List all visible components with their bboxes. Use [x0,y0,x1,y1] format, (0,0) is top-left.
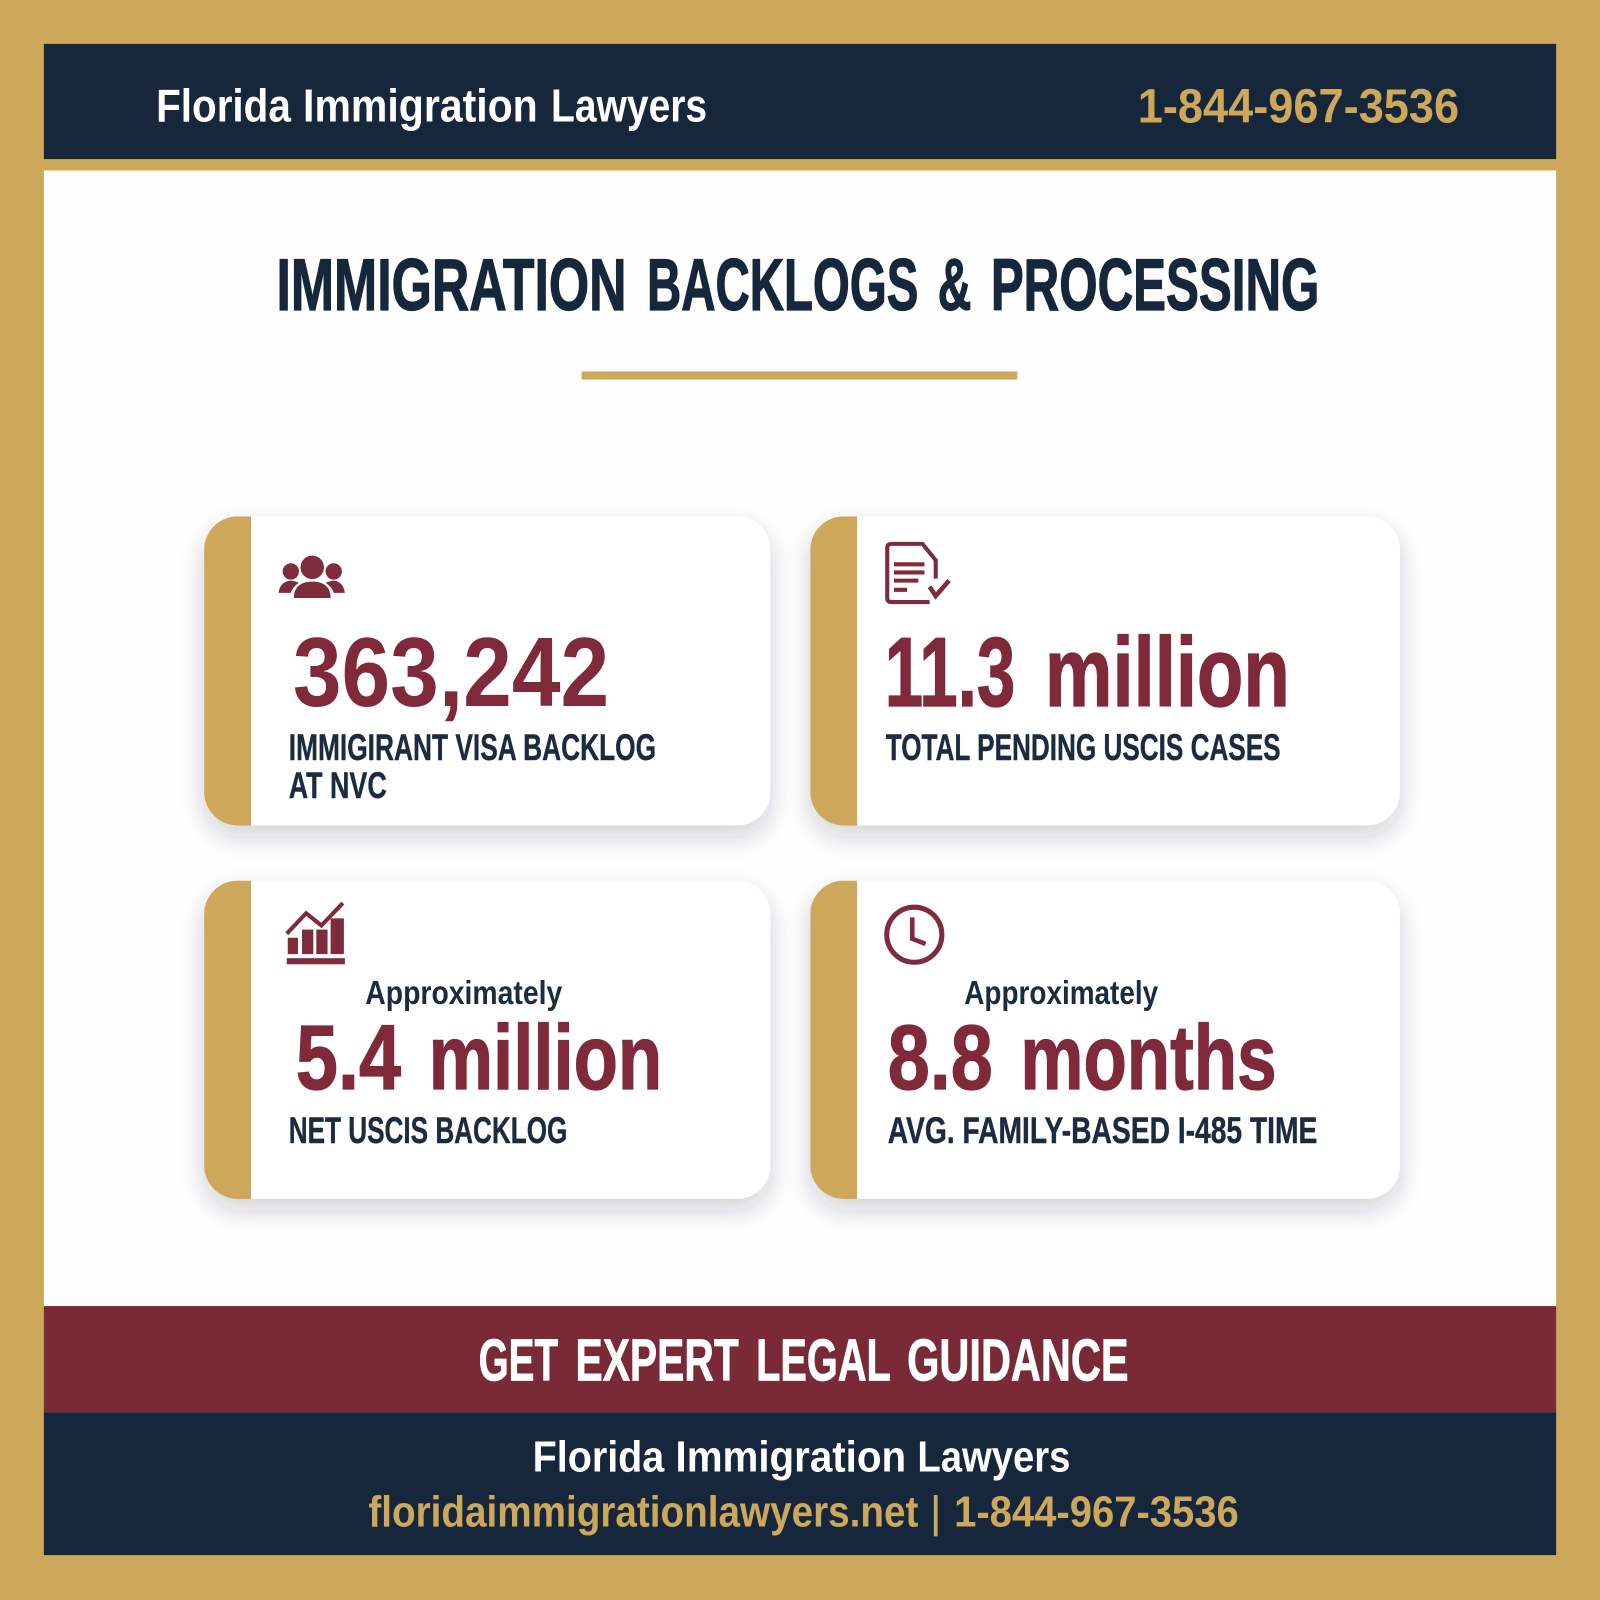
stat: 11.3 million: million [1045,617,1290,727]
stat: 5.4 million: million [429,1007,662,1109]
icon: people [279,556,345,598]
label: total pending USCIS cases: TOTAL PENDING USCIS CASES [886,727,1281,768]
header firm name: Florida [156,79,291,131]
call-to-action text: LEGAL [756,1327,891,1394]
qualifier: approximately: Approximately [365,975,562,1012]
title: PROCESSING [991,243,1319,326]
icon: bar chart with trend line [287,903,345,964]
footer bar [44,1412,1556,1555]
header firm name: Lawyers [551,79,707,131]
label: immigrant visa backlog at NVC: IMMIGIRANT VISA BACKLOG [289,727,656,768]
footer firm name: Immigration [676,1432,906,1481]
header bar [44,44,1556,170]
title: & [938,243,971,326]
footer website and phone: | [932,1488,940,1538]
call-to-action text: GET [479,1327,558,1394]
icon: document with check [887,544,949,602]
title: BACKLOGS [647,243,918,326]
title underline [582,371,1017,380]
footer website and phone: floridaimmigrationlawyers.net [368,1488,919,1537]
stat: 363,242: 363,242 [293,617,609,727]
stat: 5.4 million: 5.4 [296,1007,401,1109]
white content panel [44,170,1556,1306]
stat: 8.8 months: months [1020,1007,1277,1109]
footer website and phone: 1-844-967-3536 [954,1488,1239,1537]
call-to-action text: EXPERT [576,1327,739,1394]
label: immigrant visa backlog at NVC: AT NVC [289,765,387,806]
call-to-action text: GUIDANCE [907,1327,1129,1394]
footer firm name: Florida [533,1432,665,1481]
stat: 11.3 million: 11.3 [885,617,1015,727]
title: IMMIGRATION [277,243,627,326]
stat: 8.8 months: 8.8 [888,1007,993,1109]
panel: net USCIS backlog [204,881,770,1199]
header phone number: 1-844-967-3536 [1138,80,1459,133]
label: average family-based I-485 time: AVG. FAMILY-BASED I-485 TIME [888,1110,1317,1151]
label: net USCIS backlog: NET USCIS BACKLOG [289,1110,567,1151]
header firm name: Immigration [303,79,538,131]
panel: immigrant visa backlog [204,516,770,826]
footer firm name: Lawyers [917,1432,1070,1481]
panel: family-based processing time [810,881,1400,1199]
icon: clock [887,907,942,962]
qualifier: approximately: Approximately [964,975,1158,1012]
call-to-action banner [44,1306,1556,1412]
panel: total pending cases [810,516,1400,826]
